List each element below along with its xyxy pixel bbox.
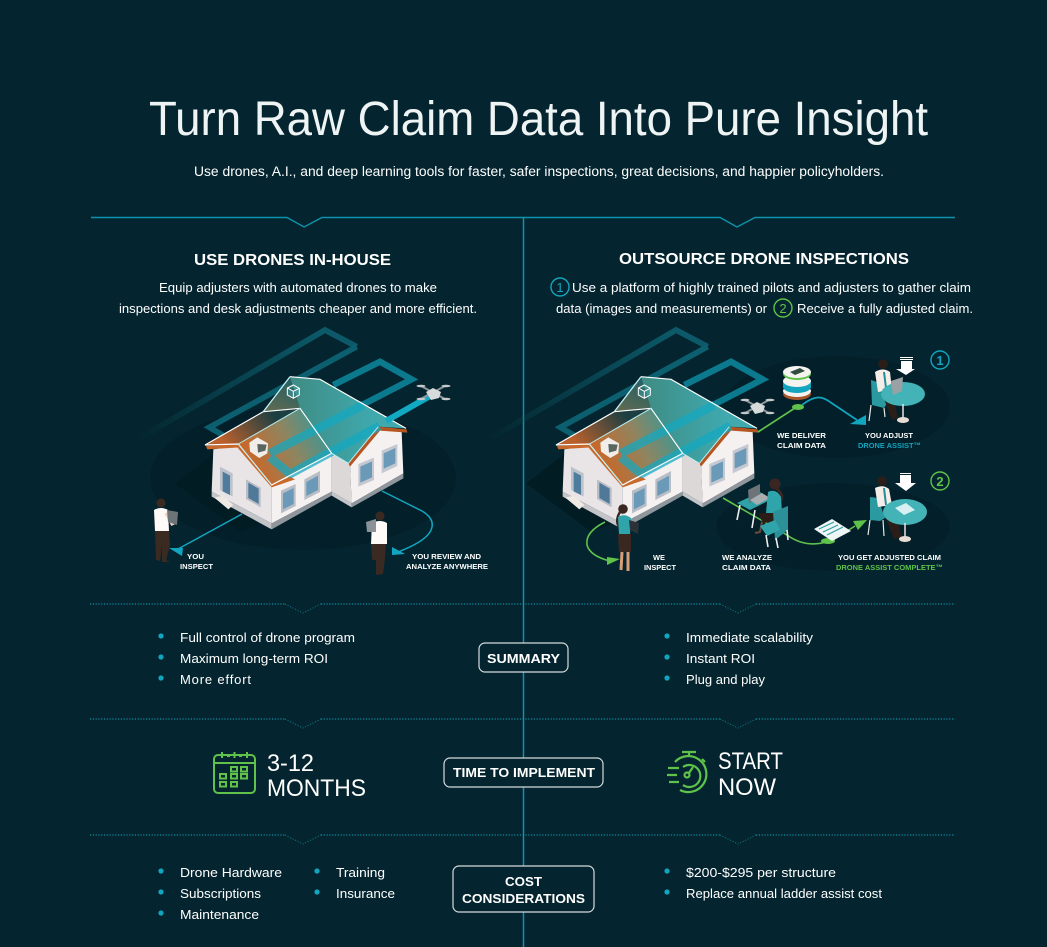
icon: calendar: [214, 752, 255, 793]
time: start now: NOW: [718, 774, 776, 801]
summary: outsource list: Immediate scalability: [686, 630, 814, 645]
label: we deliver: CLAIM DATA: [777, 441, 827, 450]
cost considerations badge: [453, 866, 594, 912]
label: we deliver: [777, 431, 827, 450]
heading: outsource: OUTSOURCE DRONE INSPECTIONS: [619, 251, 909, 268]
icon: adjuster at table 2: [868, 472, 949, 542]
summary: outsource list: [664, 630, 814, 687]
label: you adjust: [858, 431, 921, 450]
summary: outsource list: Instant ROI: [686, 651, 755, 666]
label: you adjust: DRONE ASSIST™: [858, 441, 921, 450]
icon: claim report: [814, 519, 851, 541]
heading: in-house: USE DRONES IN-HOUSE: [194, 252, 391, 269]
description: outsource: data (images and measurements) or: [556, 301, 768, 316]
summary badge: [479, 643, 568, 672]
subtitle: Use drones, A.I., and deep learning tools for faster, safer inspections, great decisions, and happier policyholders.: [194, 164, 884, 179]
summary badge: SUMMARY: [487, 651, 560, 666]
icon: stopwatch: [667, 752, 706, 792]
description: outsource: 1: [556, 280, 564, 295]
icon: adjuster at table 2: 2: [936, 474, 944, 489]
description: in-house: Equip adjusters with automated drones to make: [159, 280, 437, 295]
data flow: analyze: [587, 498, 855, 561]
panel: use drones in-house: [119, 252, 488, 575]
description: outsource: 2: [779, 301, 787, 316]
time: 3-12 months: 3-12: [267, 750, 314, 777]
costs: in-house list: Drone Hardware: [180, 865, 282, 880]
costs: outsource list: [664, 865, 882, 901]
summary: outsource list: Plug and play: [686, 672, 766, 687]
time to implement badge: TIME TO IMPLEMENT: [453, 765, 595, 780]
illustration: in-house inspection: [137, 330, 456, 575]
costs: in-house list: Subscriptions: [180, 886, 262, 901]
label: we analyze: CLAIM DATA: [722, 563, 772, 572]
costs: in-house list: Insurance: [336, 886, 395, 901]
summary: in-house list: [158, 630, 355, 687]
label: you review: ANALYZE ANYWHERE: [406, 562, 488, 571]
label: adjusted claim: [836, 553, 943, 572]
panel: outsource drone inspections: [488, 251, 973, 572]
label: you inspect: [180, 552, 213, 571]
description: in-house: inspections and desk adjustments cheaper and more efficient.: [119, 301, 477, 316]
summary: in-house list: Maximum long-term ROI: [180, 651, 328, 666]
icon: analyst at desk: [737, 478, 788, 548]
summary: in-house list: Full control of drone program: [180, 630, 355, 645]
description: in-house: [119, 280, 477, 316]
label: you adjust: YOU ADJUST: [865, 431, 913, 440]
label: we inspect: INSPECT: [644, 563, 676, 572]
costs: in-house list: Maintenance: [180, 907, 259, 922]
time to implement badge: [444, 758, 603, 787]
title: Turn Raw Claim Data Into Pure Insight: [149, 93, 928, 146]
icon: data stack: [783, 366, 811, 400]
label: you inspect: INSPECT: [180, 562, 213, 571]
label: we deliver: WE DELIVER: [777, 431, 827, 440]
label: adjusted claim: DRONE ASSIST COMPLETE™: [836, 563, 943, 572]
costs: outsource list: Replace annual ladder assist cost: [686, 886, 882, 901]
description: outsource: Use a platform of highly trained pilots and adjusters to gather claim: [572, 280, 971, 295]
label: we analyze: [722, 553, 772, 572]
data flow: deliver: [758, 397, 857, 432]
label: we inspect: [644, 553, 676, 572]
label: adjusted claim: YOU GET ADJUSTED CLAIM: [838, 553, 941, 562]
icon: inspector with tablet: [617, 504, 639, 571]
illustration: outsourced workflow: [488, 330, 950, 571]
label: we analyze: WE ANALYZE: [722, 553, 772, 562]
time: start now: START: [718, 748, 783, 775]
time: 3-12 months: MONTHS: [267, 775, 366, 802]
icon: adjuster at table 1: [869, 351, 949, 423]
costs: in-house list: [158, 865, 395, 922]
label: we inspect: WE: [653, 553, 665, 562]
time: 3-12 months: [267, 750, 366, 802]
cost considerations badge: CONSIDERATIONS: [462, 891, 585, 906]
description: outsource: Receive a fully adjusted claim.: [797, 301, 973, 316]
description: outsource: [551, 278, 973, 317]
label: you review: [406, 552, 488, 571]
cost considerations badge: COST: [505, 874, 542, 889]
summary: in-house list: More effort: [180, 672, 251, 687]
label: you review: YOU REVIEW AND: [412, 552, 482, 561]
costs: outsource list: $200-$295 per structure: [686, 865, 836, 880]
costs: in-house list: Training: [336, 865, 385, 880]
time: start now: [718, 748, 783, 801]
label: you inspect: YOU: [187, 552, 205, 561]
icon: adjuster at table 1: 1: [936, 353, 944, 368]
